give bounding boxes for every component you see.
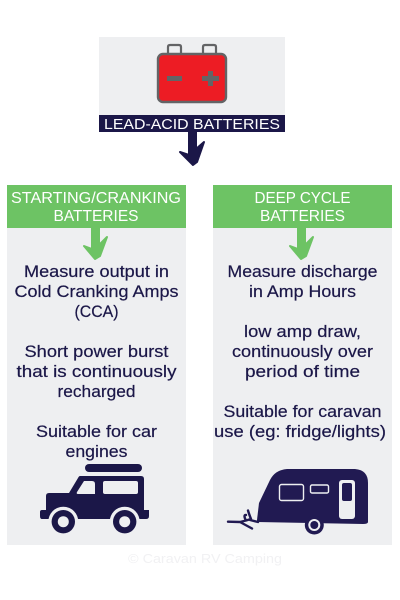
text: measure output: Measure output in — [24, 263, 169, 281]
text: suitable for caravan — [214, 403, 386, 441]
panel: lead-acid header — [99, 37, 285, 133]
text: short power burst: that is continuously — [16, 363, 177, 381]
heading: deep cycle: DEEP CYCLE — [254, 190, 350, 207]
text: low amp draw: period of time — [245, 363, 360, 381]
text: low amp draw — [232, 323, 374, 381]
text: short power burst: Short power burst — [24, 343, 169, 361]
icon: battery — [158, 45, 226, 102]
heading: starting/cranking: STARTING/CRANKING — [11, 190, 181, 207]
text: measure output: (CCA) — [74, 303, 118, 321]
title bar: LEAD-ACID BATTERIES — [104, 117, 280, 133]
text: short power burst: recharged — [58, 383, 136, 401]
icon: 4x4 vehicle — [40, 464, 149, 537]
text: suitable for car engines — [36, 423, 158, 461]
text: suitable for caravan: Suitable for caravan — [224, 403, 382, 421]
text: measure output: Cold Cranking Amps — [14, 283, 178, 301]
text: measure output — [14, 263, 178, 321]
arrow: green right — [290, 228, 313, 259]
text: measure discharge: Measure discharge — [228, 263, 378, 281]
footer credit: © Caravan RV Camping — [128, 551, 282, 566]
text: measure discharge — [228, 263, 378, 301]
text: suitable for car engines: Suitable for car — [36, 423, 158, 441]
panel: deep cycle batteries — [213, 185, 392, 545]
text: suitable for car engines: engines — [66, 443, 128, 461]
arrow: green left — [84, 228, 107, 259]
icon: caravan — [228, 469, 368, 534]
heading: starting/cranking: BATTERIES — [54, 208, 138, 225]
text: low amp draw: low amp draw, — [244, 323, 361, 341]
arrow: lead-acid down — [180, 132, 204, 165]
panel: starting/cranking batteries — [7, 185, 186, 545]
heading: starting/cranking — [7, 185, 186, 228]
text: suitable for caravan: use (eg: fridge/lights) — [214, 423, 386, 441]
text: short power burst — [16, 343, 177, 401]
text: low amp draw: continuously over — [232, 343, 374, 361]
heading: deep cycle: BATTERIES — [260, 208, 345, 225]
text: measure discharge: in Amp Hours — [249, 283, 356, 301]
heading: deep cycle — [213, 185, 392, 228]
